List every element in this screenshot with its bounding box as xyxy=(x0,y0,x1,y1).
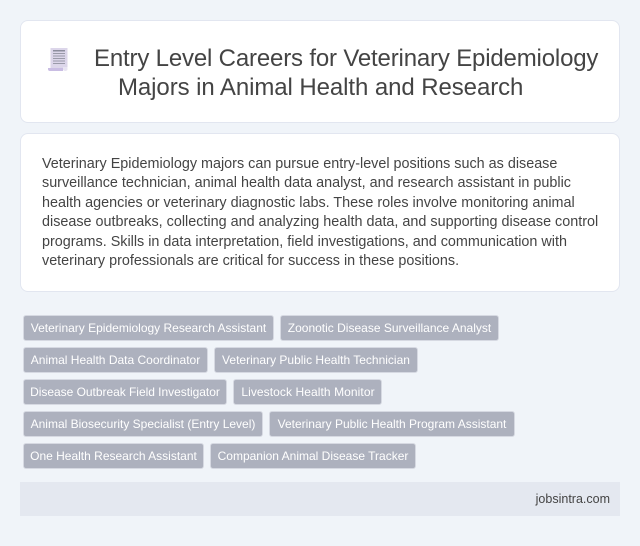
description text: surveillance technician, animal health data analyst, and research assistant in public xyxy=(42,175,571,191)
tag: Livestock Health Monitor xyxy=(241,385,375,399)
description text: programs. Skills in data interpretation, field investigations, and communication with xyxy=(42,234,567,250)
tag xyxy=(23,411,263,437)
footer source text: jobsintra.com xyxy=(536,492,610,506)
tag xyxy=(23,315,274,341)
tag: Veterinary Public Health Program Assistant xyxy=(278,417,506,431)
title: Majors in Animal Health and Research xyxy=(118,74,523,101)
tag: Veterinary Public Health Technician xyxy=(222,353,410,367)
tag: Zoonotic Disease Surveillance Analyst xyxy=(288,321,491,335)
description text: Veterinary Epidemiology majors can pursue entry-level positions such as disease xyxy=(42,156,557,172)
tag: One Health Research Assistant xyxy=(30,449,197,463)
tag: Animal Health Data Coordinator xyxy=(31,353,200,367)
tag xyxy=(269,411,515,437)
tag xyxy=(23,443,204,469)
tag xyxy=(23,379,227,405)
tag: Disease Outbreak Field Investigator xyxy=(30,385,220,399)
panel: description xyxy=(20,133,620,292)
icon: document scroll xyxy=(48,48,68,71)
tag xyxy=(280,315,499,341)
tag: Animal Biosecurity Specialist (Entry Level) xyxy=(31,417,255,431)
description text: veterinary professionals are critical for success in these positions. xyxy=(42,253,459,269)
title xyxy=(94,45,598,101)
description text: health agencies or veterinary diagnostic labs. These roles involve monitoring animal xyxy=(42,195,575,211)
tag xyxy=(23,347,208,373)
description text: disease outbreaks, collecting and analyzing health data, and supporting disease control xyxy=(42,214,598,230)
title: Entry Level Careers for Veterinary Epidemiology xyxy=(94,45,598,72)
footer bar xyxy=(20,482,620,516)
panel: header xyxy=(20,20,620,123)
tag list xyxy=(23,315,515,469)
description text xyxy=(42,156,598,269)
tag xyxy=(210,443,416,469)
tag: Companion Animal Disease Tracker xyxy=(218,449,408,463)
tag xyxy=(233,379,382,405)
tag xyxy=(214,347,418,373)
tag: Veterinary Epidemiology Research Assistant xyxy=(31,321,266,335)
